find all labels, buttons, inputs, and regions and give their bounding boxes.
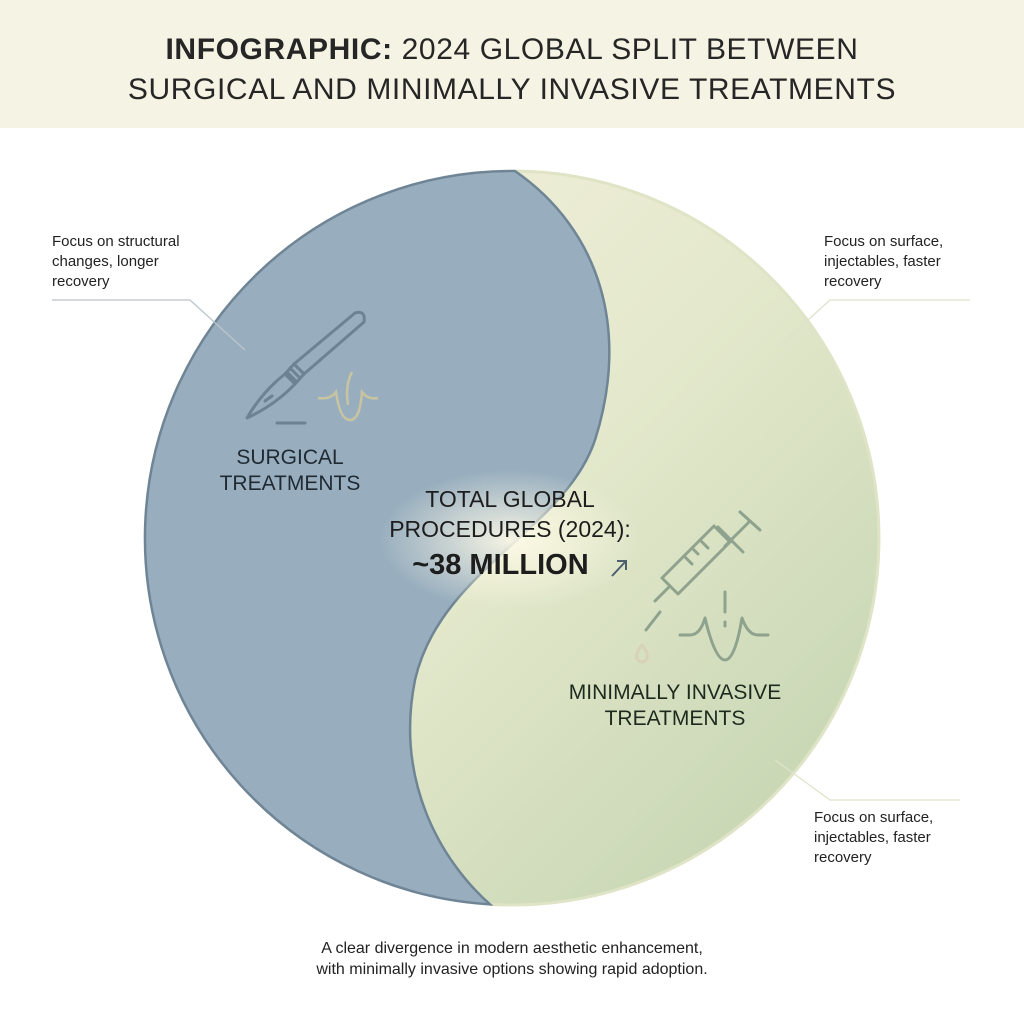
title: INFOGRAPHIC: 2024 GLOBAL SPLIT BETWEEN: [166, 33, 858, 66]
right top note: injectables, faster: [824, 253, 941, 270]
header band: [0, 0, 1024, 128]
left note: [52, 233, 180, 290]
right half: minimally invasive: [145, 171, 879, 905]
label minimally invasive: [569, 681, 781, 730]
right bottom note: [814, 809, 933, 866]
center total: ~38 MILLION: [412, 549, 589, 581]
left note: recovery: [52, 273, 110, 290]
left half: surgical: [145, 171, 609, 904]
right top note: Focus on surface,: [824, 233, 943, 250]
title: [128, 33, 896, 106]
center total: PROCEDURES (2024):: [389, 516, 631, 542]
label surgical: SURGICAL: [236, 446, 344, 469]
left note: changes, longer: [52, 253, 159, 270]
label minimally invasive: MINIMALLY INVASIVE: [569, 681, 781, 704]
center total: [389, 486, 631, 581]
center glow: [380, 470, 640, 610]
center total: TOTAL GLOBAL: [425, 486, 595, 512]
left note: Focus on structural: [52, 233, 180, 250]
icon: scalpel: [247, 312, 364, 423]
arrow icon: [612, 561, 626, 576]
footer caption: A clear divergence in modern aesthetic enhancement,: [321, 940, 703, 957]
leader lines: [52, 300, 970, 800]
right bottom note: Focus on surface,: [814, 809, 933, 826]
footer caption: with minimally invasive options showing rapid adoption.: [316, 961, 708, 978]
right bottom note: recovery: [814, 849, 872, 866]
right top note: recovery: [824, 273, 882, 290]
footer caption: [316, 940, 708, 978]
label surgical: [220, 446, 360, 495]
icon: syringe: [637, 512, 768, 662]
label minimally invasive: TREATMENTS: [605, 707, 745, 730]
right top note: [824, 233, 943, 290]
label surgical: TREATMENTS: [220, 472, 360, 495]
right bottom note: injectables, faster: [814, 829, 931, 846]
icon: skin follicle: [318, 372, 378, 420]
title: SURGICAL AND MINIMALLY INVASIVE TREATMENTS: [128, 73, 896, 106]
